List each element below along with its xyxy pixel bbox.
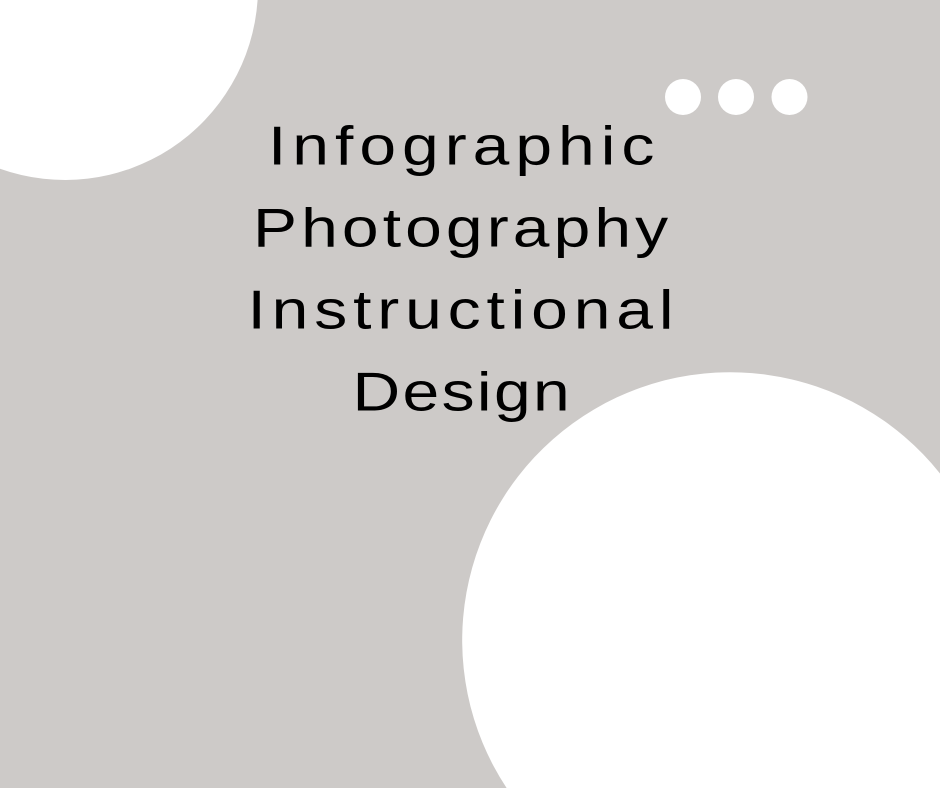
title: Infographic: [268, 115, 654, 176]
three dots icon: [665, 79, 808, 115]
title: Instructional: [248, 279, 674, 340]
decorative circle: top left: [0, 0, 258, 180]
title: Design: [352, 361, 570, 422]
title: [248, 115, 674, 422]
title: Photography: [253, 197, 669, 258]
decorative circle: bottom right: [462, 372, 940, 788]
